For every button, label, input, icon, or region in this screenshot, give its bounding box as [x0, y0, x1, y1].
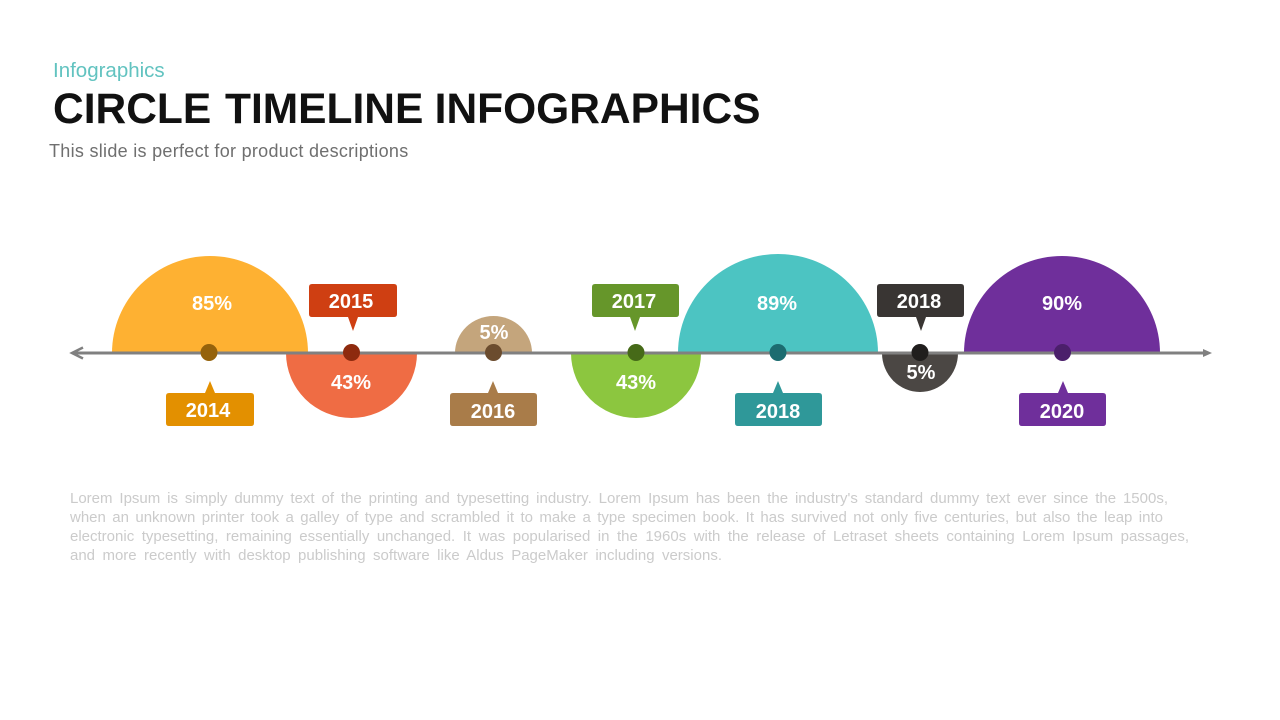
semicircle: 2015 43% — [286, 353, 417, 418]
semicircle: 2014 85% — [112, 256, 308, 353]
title: CIRCLE TIMELINE INFOGRAPHICS — [53, 86, 760, 133]
body paragraph: and more recently with desktop publishing software like Aldus PageMaker including versions. — [70, 547, 722, 564]
callout: 2016 — [450, 381, 537, 426]
semicircle: 2018 5% — [882, 353, 958, 392]
callout: 2018 dark: 2018 — [897, 291, 941, 313]
semicircle: 2017 43%: 43% — [616, 372, 656, 394]
node: 2020 — [1054, 344, 1071, 361]
semicircle: 2015 43%: 43% — [331, 372, 371, 394]
semicircle: 2016 5% — [455, 316, 532, 353]
callout: 2014 — [166, 381, 254, 426]
body paragraph: electronic typesetting, remaining essentially unchanged. It was popularised in the 1960s with the release of Letraset sheets containing Lorem Ipsum passages, — [70, 528, 1189, 545]
node: 2018 dark — [912, 344, 928, 361]
body paragraph — [70, 490, 1189, 564]
node: 2018 teal — [770, 344, 786, 361]
node: 2016 — [485, 344, 502, 361]
semicircle: 2018 89%: 89% — [757, 293, 797, 315]
eyebrow label: Infographics — [53, 59, 165, 82]
body paragraph: when an unknown printer took a galley of type and scrambled it to make a type specimen book. It has survived not only five centuries, but also the leap into — [70, 509, 1163, 526]
semicircle: 2018 89% — [678, 254, 878, 353]
subtitle: This slide is perfect for product descriptions — [49, 141, 408, 161]
callout: 2014: 2014 — [186, 400, 231, 422]
callout: 2015 — [309, 284, 397, 331]
callout: 2020: 2020 — [1040, 401, 1084, 423]
callout: 2016: 2016 — [471, 401, 515, 423]
semicircle: 2017 43% — [571, 353, 701, 418]
callout: 2020 — [1019, 381, 1106, 426]
callout: 2018 dark — [877, 284, 964, 331]
node: 2015 — [343, 344, 360, 361]
semicircle: 2020 90%: 90% — [1042, 293, 1082, 315]
timeline axis with arrows — [72, 348, 1212, 358]
node: 2017 — [628, 344, 644, 361]
callout: 2017: 2017 — [612, 291, 656, 313]
semicircle: 2020 90% — [964, 256, 1160, 353]
callout: 2017 — [592, 284, 679, 331]
body paragraph: Lorem Ipsum is simply dummy text of the printing and typesetting industry. Lorem Ipsum has been the industry's standard dummy text ever since the 1500s, — [70, 490, 1168, 507]
callout: 2015: 2015 — [329, 291, 373, 313]
callout: 2018 teal: 2018 — [756, 401, 800, 423]
node: 2014 — [200, 344, 218, 361]
semicircle: 2018 5%: 5% — [907, 362, 936, 384]
semicircle: 2014 85%: 85% — [192, 293, 232, 315]
semicircle: 2016 5%: 5% — [480, 322, 509, 344]
callout: 2018 teal — [735, 381, 822, 426]
